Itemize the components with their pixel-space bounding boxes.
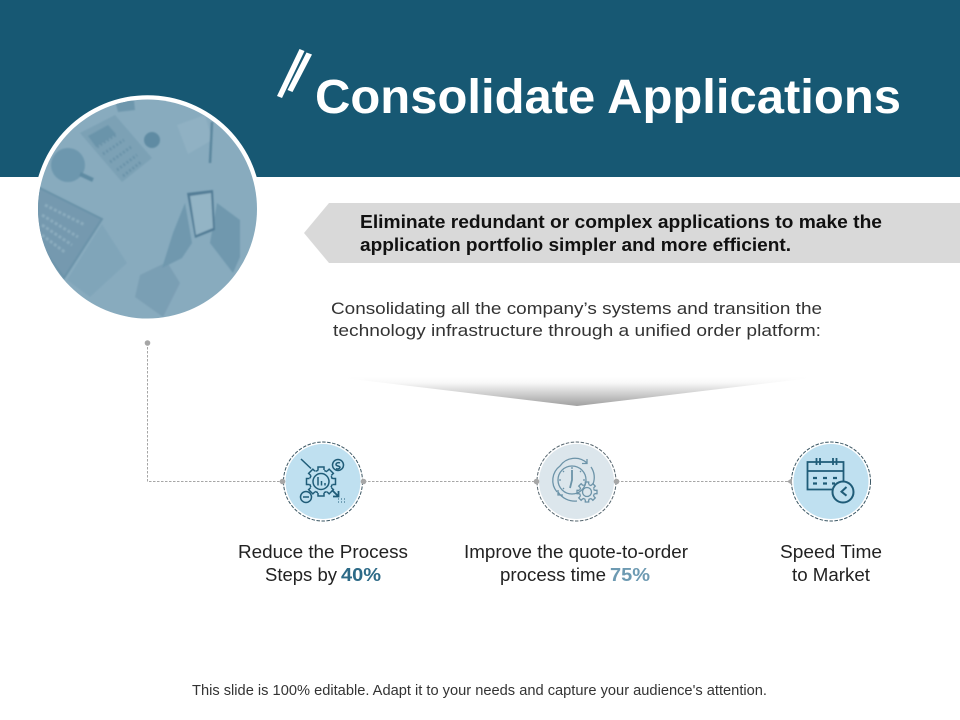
- step 3 label: to Market: [792, 565, 870, 585]
- step 1: reduce process: [238, 442, 413, 585]
- callout text: application portfolio simpler and more efficient.: [360, 234, 791, 255]
- footer note: This slide is 100% editable. Adapt it to your needs and capture your audience's attention.: [192, 683, 767, 699]
- callout arrow banner: [304, 203, 960, 263]
- title: Consolidate Applications: [315, 71, 901, 124]
- photo: coffee cup: [51, 148, 93, 182]
- step 3 label: Speed Time: [780, 542, 882, 562]
- photo: apple: [144, 132, 160, 148]
- connector start dot: [145, 340, 150, 346]
- photo circle: [34, 95, 261, 323]
- icon: gear with dollar and arrow: [280, 442, 366, 521]
- step 1 label: 40%: [341, 565, 381, 585]
- step 2 label: process time: [500, 565, 606, 585]
- downward wedge: [335, 376, 820, 407]
- step 1 label: Reduce the Process: [238, 542, 408, 562]
- intro paragraph: Consolidating all the company’s systems and transition the: [331, 299, 822, 318]
- photo: top papers: [115, 100, 135, 112]
- intro paragraph: technology infrastructure through a unified order platform:: [333, 321, 821, 340]
- icon: title slashes: [277, 49, 312, 98]
- icon: clock with gear: [534, 442, 619, 521]
- step 2 label: Improve the quote-to-order: [464, 542, 688, 562]
- step 3: speed to market: [780, 442, 887, 585]
- photo: open notebook: [38, 186, 112, 292]
- dotted connector: [148, 343, 790, 482]
- icon: calendar with clock: [787, 442, 870, 521]
- header band: [0, 0, 960, 177]
- photo: calculator: [80, 115, 152, 182]
- step 1 label: Steps by: [265, 565, 337, 585]
- step 2: improve quote to order: [464, 442, 693, 585]
- photo: notes and pen: [204, 116, 214, 164]
- step 2 label: 75%: [610, 565, 650, 585]
- photo: hands and phone: [135, 190, 240, 317]
- callout text: Eliminate redundant or complex applications to make the: [360, 211, 882, 232]
